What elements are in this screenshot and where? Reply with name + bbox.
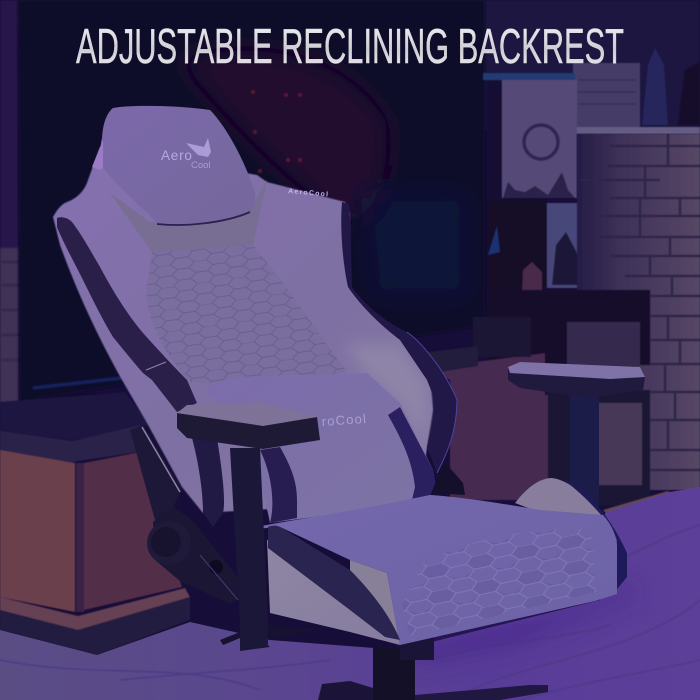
armrest strut legs xyxy=(220,626,320,645)
lumbar left strap xyxy=(260,447,297,523)
chair rear hinge xyxy=(433,460,465,495)
left armrest xyxy=(177,402,320,651)
chair base and wheels xyxy=(318,638,548,700)
headrest edge highlight xyxy=(92,140,103,170)
left bolster fabric xyxy=(267,540,400,645)
seat cushion xyxy=(240,478,627,645)
headrest pillow xyxy=(92,106,255,225)
lumbar right strap xyxy=(388,407,435,500)
brick wall xyxy=(577,134,700,490)
left dark wing xyxy=(57,217,197,412)
right dark band xyxy=(341,202,457,473)
glass side table xyxy=(487,290,650,506)
hexagon quilting panel xyxy=(146,245,347,385)
AeroCool back label: AeroCool xyxy=(288,188,328,198)
lower left dark wing xyxy=(192,438,224,527)
left bolster dark xyxy=(268,526,400,640)
headrest logo: Cool xyxy=(191,160,211,171)
seat top and front xyxy=(240,495,617,645)
centre fabric strip under headrest xyxy=(110,180,267,252)
shelf with game box and figures xyxy=(483,48,700,295)
right armrest xyxy=(508,362,645,398)
recline mechanism xyxy=(130,425,240,604)
floor xyxy=(0,487,700,700)
band edge highlight xyxy=(407,332,457,473)
left cabinet xyxy=(0,392,190,655)
right armrest post xyxy=(570,392,599,507)
right cabinet xyxy=(427,317,672,514)
headrest logo xyxy=(161,138,211,171)
headrest logo: Aero xyxy=(161,148,193,163)
right side lighter fabric xyxy=(345,345,428,440)
lumbar logo text: roCool xyxy=(321,411,368,429)
chair backrest xyxy=(53,147,457,527)
seat back wing xyxy=(515,478,603,520)
seat hex quilting xyxy=(402,529,596,636)
headrest shadow line xyxy=(157,212,250,225)
dark wing seam xyxy=(146,362,166,370)
television xyxy=(18,0,485,408)
lumbar pillow xyxy=(207,373,435,523)
